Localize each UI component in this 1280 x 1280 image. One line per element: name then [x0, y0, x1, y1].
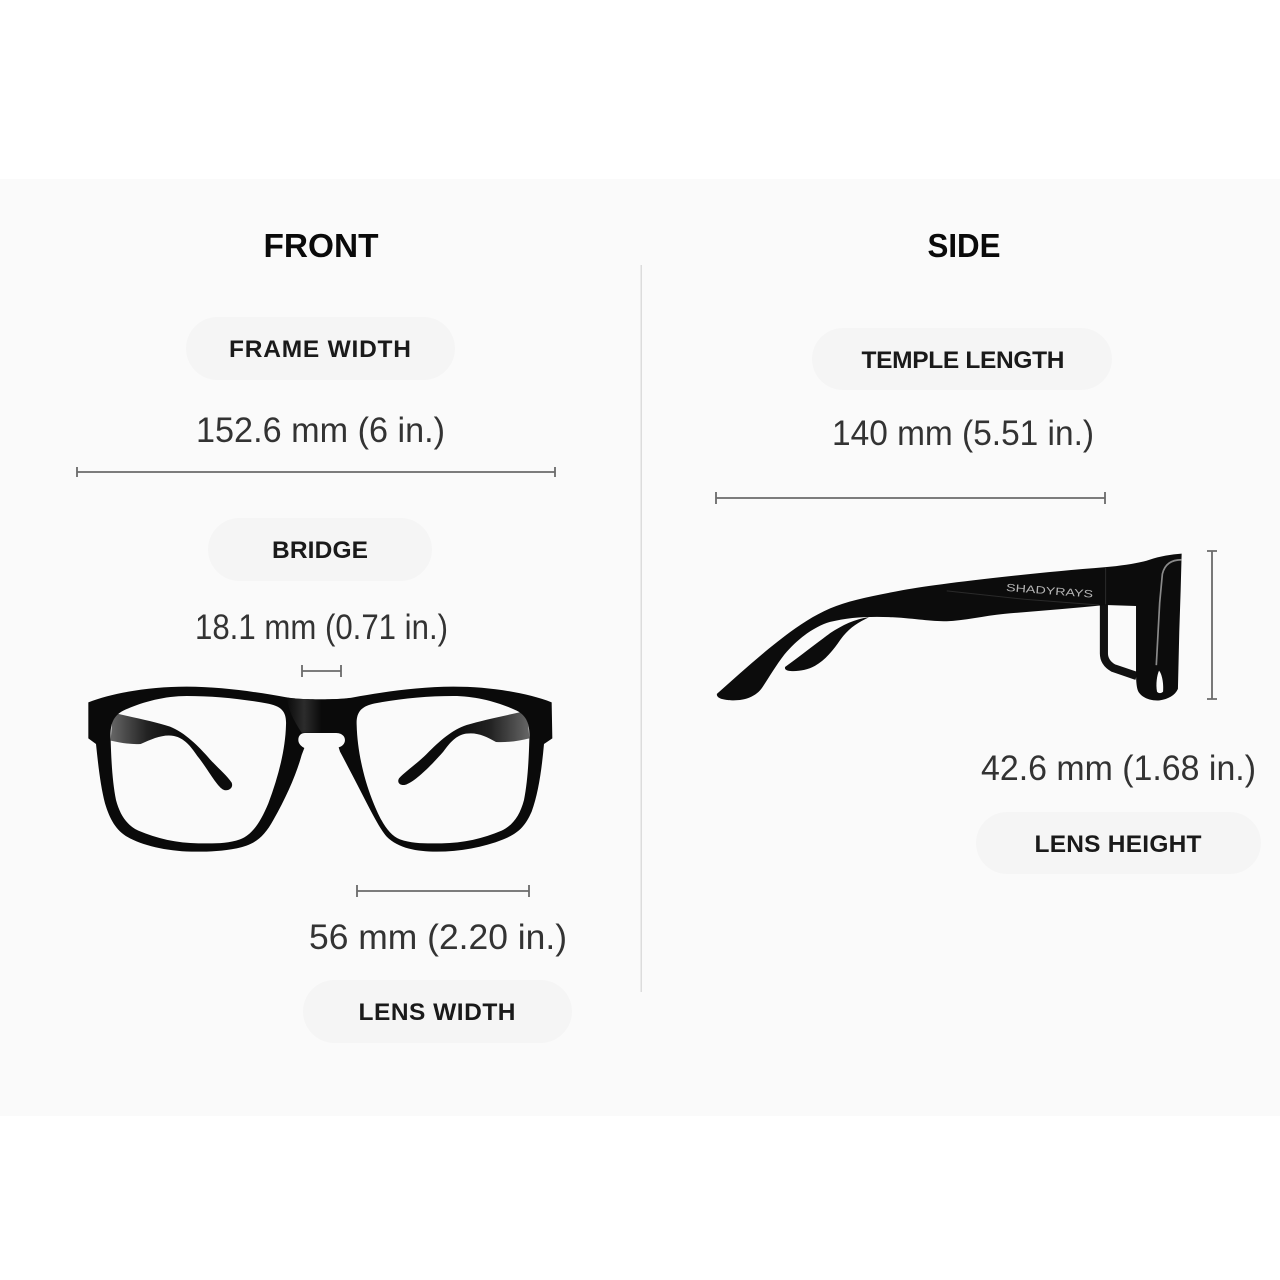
glasses: side view: [717, 554, 1182, 700]
value: temple length: 140 mm (5.51 in.): [832, 414, 1094, 453]
temple arm and front rim: [717, 554, 1182, 700]
right temple seen through lens: [398, 711, 529, 785]
label: bridge: [208, 518, 432, 581]
label: bridge: BRIDGE: [272, 537, 368, 564]
label: frame width: [186, 317, 455, 380]
measure line: lens height: [1207, 551, 1217, 699]
label: lens height: [976, 812, 1261, 874]
label: frame width: FRAME WIDTH: [229, 336, 411, 363]
value: lens height: 42.6 mm (1.68 in.): [981, 749, 1256, 788]
frame: [88, 687, 552, 852]
label: lens height: LENS HEIGHT: [1034, 831, 1202, 858]
background panel: [0, 179, 1280, 1116]
panel: side: [716, 227, 1261, 874]
value: bridge: 18.1 mm (0.71 in.): [195, 608, 448, 647]
label: lens width: LENS WIDTH: [358, 999, 516, 1026]
ear piece: [785, 617, 869, 671]
lens opening: [1156, 671, 1163, 693]
label: temple length: TEMPLE LENGTH: [862, 347, 1064, 374]
heading: side: SIDE: [928, 227, 1000, 264]
measure line: frame width: [77, 467, 555, 477]
panel: front: [77, 227, 572, 1043]
measure line: temple length: [716, 492, 1105, 504]
vertical divider: [640, 265, 642, 992]
measure line: lens width: [357, 885, 529, 897]
lens edge highlight: [1156, 560, 1182, 665]
rear lens rim: [1104, 605, 1137, 676]
label: lens width: [303, 980, 572, 1043]
heading: front: FRONT: [264, 227, 378, 264]
value: frame width: 152.6 mm (6 in.): [196, 411, 445, 450]
brand text: SHADYRAYS: [1006, 583, 1093, 601]
temple crease: [947, 568, 1106, 605]
glasses: front view: [88, 687, 552, 852]
bridge highlight: [287, 697, 357, 733]
value: lens width: 56 mm (2.20 in.): [309, 918, 567, 957]
label: temple length: [812, 328, 1112, 390]
measure line: bridge: [302, 665, 341, 677]
left temple seen through lens: [111, 713, 232, 790]
